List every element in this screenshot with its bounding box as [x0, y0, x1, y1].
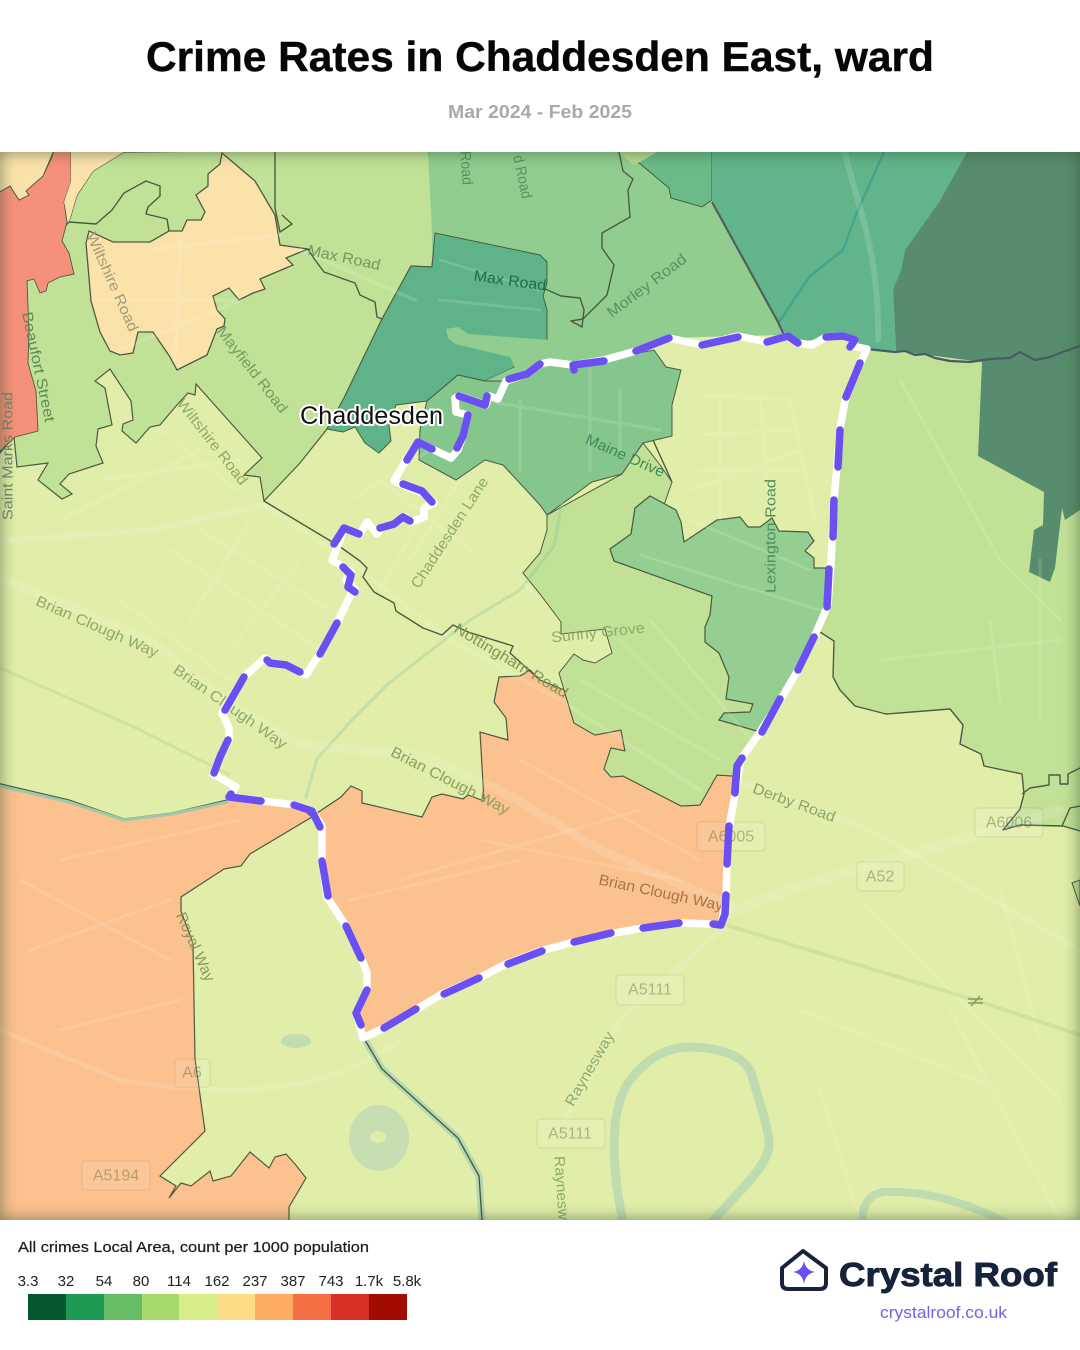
icon: railway station — [968, 996, 983, 1006]
road labels: Royal Way — [172, 910, 218, 985]
road labels: Saint Marks Road — [0, 392, 16, 520]
ward boundary: white underlay and purple dashes — [213, 336, 867, 1038]
legend scale values: 114 — [167, 1273, 191, 1290]
road number shields: A5111 — [548, 1126, 592, 1142]
road number shields: A6006 — [986, 814, 1032, 832]
road labels: Chaddesden Lane — [408, 474, 492, 592]
area: Wiltshire Road peach zone — [86, 153, 308, 370]
road labels: Brian Clough Way — [597, 871, 725, 915]
legend scale values: 80 — [133, 1273, 149, 1290]
area: Max Road dark green zone — [327, 233, 547, 453]
road labels: Max Road — [306, 242, 382, 274]
area: north green patch — [638, 150, 712, 207]
area: east light green zone — [820, 349, 1080, 831]
legend scale values — [18, 1273, 422, 1290]
road number shields: A52 — [866, 868, 894, 886]
water features — [0, 152, 1005, 1222]
logo: Crystal Roof — [782, 1251, 1058, 1293]
road labels: Raynesway — [562, 1028, 618, 1109]
area: north-east dark green zone — [712, 152, 967, 351]
website link text: crystalroof.co.uk — [880, 1304, 1008, 1322]
area boundary lines — [69, 152, 1080, 1220]
road number shields: A6 — [182, 1064, 202, 1082]
area: Lexington Road green zone — [610, 496, 829, 732]
legend scale values: 387 — [280, 1273, 306, 1290]
road labels: Brian Clough Way — [388, 744, 513, 819]
road labels: Beaufort Street — [18, 310, 58, 424]
area: north-west light green zone — [0, 149, 435, 501]
road number shields: A5111 — [628, 982, 672, 998]
road number shields: A5194 — [93, 1168, 139, 1184]
road number shields: A6005 — [708, 828, 754, 846]
area: darkest north-east zone — [893, 152, 1080, 582]
road labels: Mayfield Road — [213, 323, 291, 417]
legend scale values: 5.8k — [393, 1273, 422, 1290]
legend title: All crimes Local Area, count per 1000 population — [18, 1239, 369, 1256]
area: south-west orange zone — [0, 783, 312, 1224]
road network — [0, 152, 1080, 1220]
road labels: Max Road — [473, 268, 547, 294]
legend scale values: 237 — [242, 1273, 268, 1290]
road labels: Maine Drive — [583, 431, 667, 481]
place label: Chaddesden: Chaddesden — [300, 402, 443, 430]
area: salmon high-crime zone — [0, 150, 74, 453]
legend colour scale — [28, 1294, 407, 1320]
area: top-left peach corner — [0, 150, 54, 200]
area: central light green zone — [523, 443, 760, 806]
road labels: Derby Road — [750, 780, 838, 826]
area: central orange zone — [317, 670, 733, 1038]
area: mid-green notch — [446, 327, 550, 381]
legend scale values: 54 — [96, 1273, 112, 1290]
area: small east wedge — [1072, 880, 1080, 906]
road labels: d Road — [509, 154, 535, 200]
road labels: Road — [456, 150, 476, 186]
road labels: Morley Road — [604, 251, 690, 321]
choropleth map — [0, 149, 1080, 1224]
legend scale values: 32 — [58, 1273, 74, 1290]
road labels: Wiltshire Road — [82, 230, 142, 334]
road labels — [0, 150, 838, 1221]
road labels: Brian Clough Way — [33, 593, 161, 661]
area: peach sliver — [64, 152, 124, 222]
legend scale values: 1.7k — [355, 1273, 384, 1290]
road number shields — [82, 808, 1043, 1190]
road labels: Brian Clough Way — [170, 661, 291, 753]
logo wordmark: Crystal Roof — [839, 1256, 1058, 1293]
legend scale values: 3.3 — [18, 1273, 38, 1290]
legend scale values: 162 — [204, 1273, 230, 1290]
area: small tan tip — [619, 152, 657, 165]
legend scale values: 743 — [318, 1273, 344, 1290]
area: north mid-green zone — [428, 152, 782, 362]
subtitle: date range: Mar 2024 - Feb 2025 — [448, 101, 632, 122]
road labels: Lexington Road — [762, 479, 780, 593]
area: Maine Drive green zone — [419, 350, 681, 515]
railway lines — [0, 668, 1080, 1035]
road labels: Nottingham Road — [451, 620, 571, 702]
icon: house with star — [782, 1251, 826, 1289]
road labels: Raynesw — [550, 1155, 572, 1221]
road labels: Sunny Grove — [550, 620, 646, 646]
road labels: Wiltshire Road — [173, 395, 251, 489]
title: Crime Rates in Chaddesden East, ward — [146, 33, 934, 80]
